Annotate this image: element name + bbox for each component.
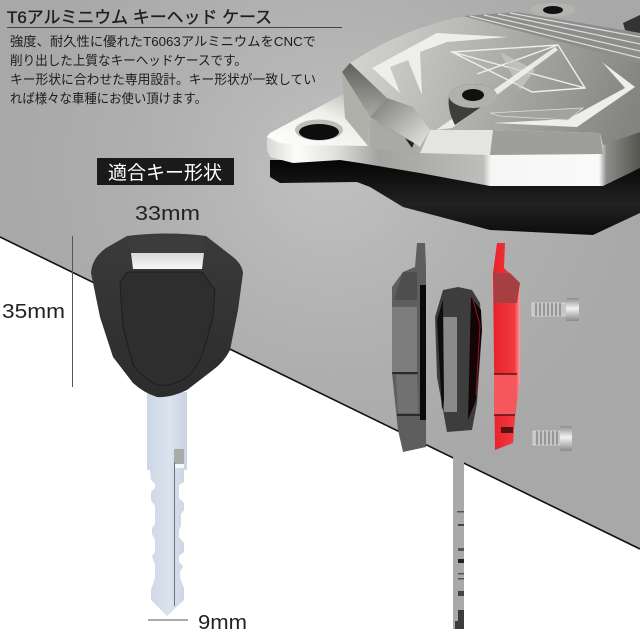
lower bolt	[533, 426, 572, 451]
description text: 強度、耐久性に優れたT6063アルミニウムをCNCで	[10, 34, 316, 49]
engraved insignia	[372, 33, 635, 127]
top face	[350, 12, 640, 145]
key head	[91, 234, 243, 397]
title: T6アルミニウム キーヘッド ケース	[7, 8, 272, 27]
description text: れば様々な車種にお使い頂けます。	[10, 91, 207, 106]
fitting key shape label: 適合キー形状	[108, 162, 222, 184]
upper bolt	[532, 298, 579, 321]
fitting key shape label	[97, 158, 234, 185]
key head side view	[435, 287, 482, 432]
mounting tab	[267, 95, 370, 146]
width dimension 33mm: 33mm	[135, 203, 200, 225]
exploded view	[392, 243, 579, 629]
key blade	[147, 392, 187, 616]
tab screw hole	[295, 120, 343, 140]
height dimension 35mm: 35mm	[2, 301, 65, 323]
rear bolt	[531, 3, 575, 17]
assembled key case photo	[267, 3, 640, 235]
description text: 削り出した上質なキーヘッドケースです。	[10, 53, 247, 68]
reflection stripe	[436, 47, 558, 130]
silver side band	[267, 95, 640, 186]
cooling fins	[463, 12, 640, 63]
red case shell	[493, 243, 520, 450]
description text	[10, 34, 316, 106]
left bevel facets	[342, 63, 387, 117]
left case shell	[392, 243, 426, 452]
blade width dimension 9mm: 9mm	[198, 612, 247, 634]
blade width dimension 9mm	[148, 612, 247, 634]
description text: キー形状に合わせた専用設計。キー形状が一致してい	[10, 72, 316, 87]
key illustration	[91, 234, 243, 616]
centre bolt	[449, 84, 497, 125]
black base	[270, 160, 640, 235]
rear tab	[623, 15, 640, 34]
key blade side view	[453, 430, 464, 629]
